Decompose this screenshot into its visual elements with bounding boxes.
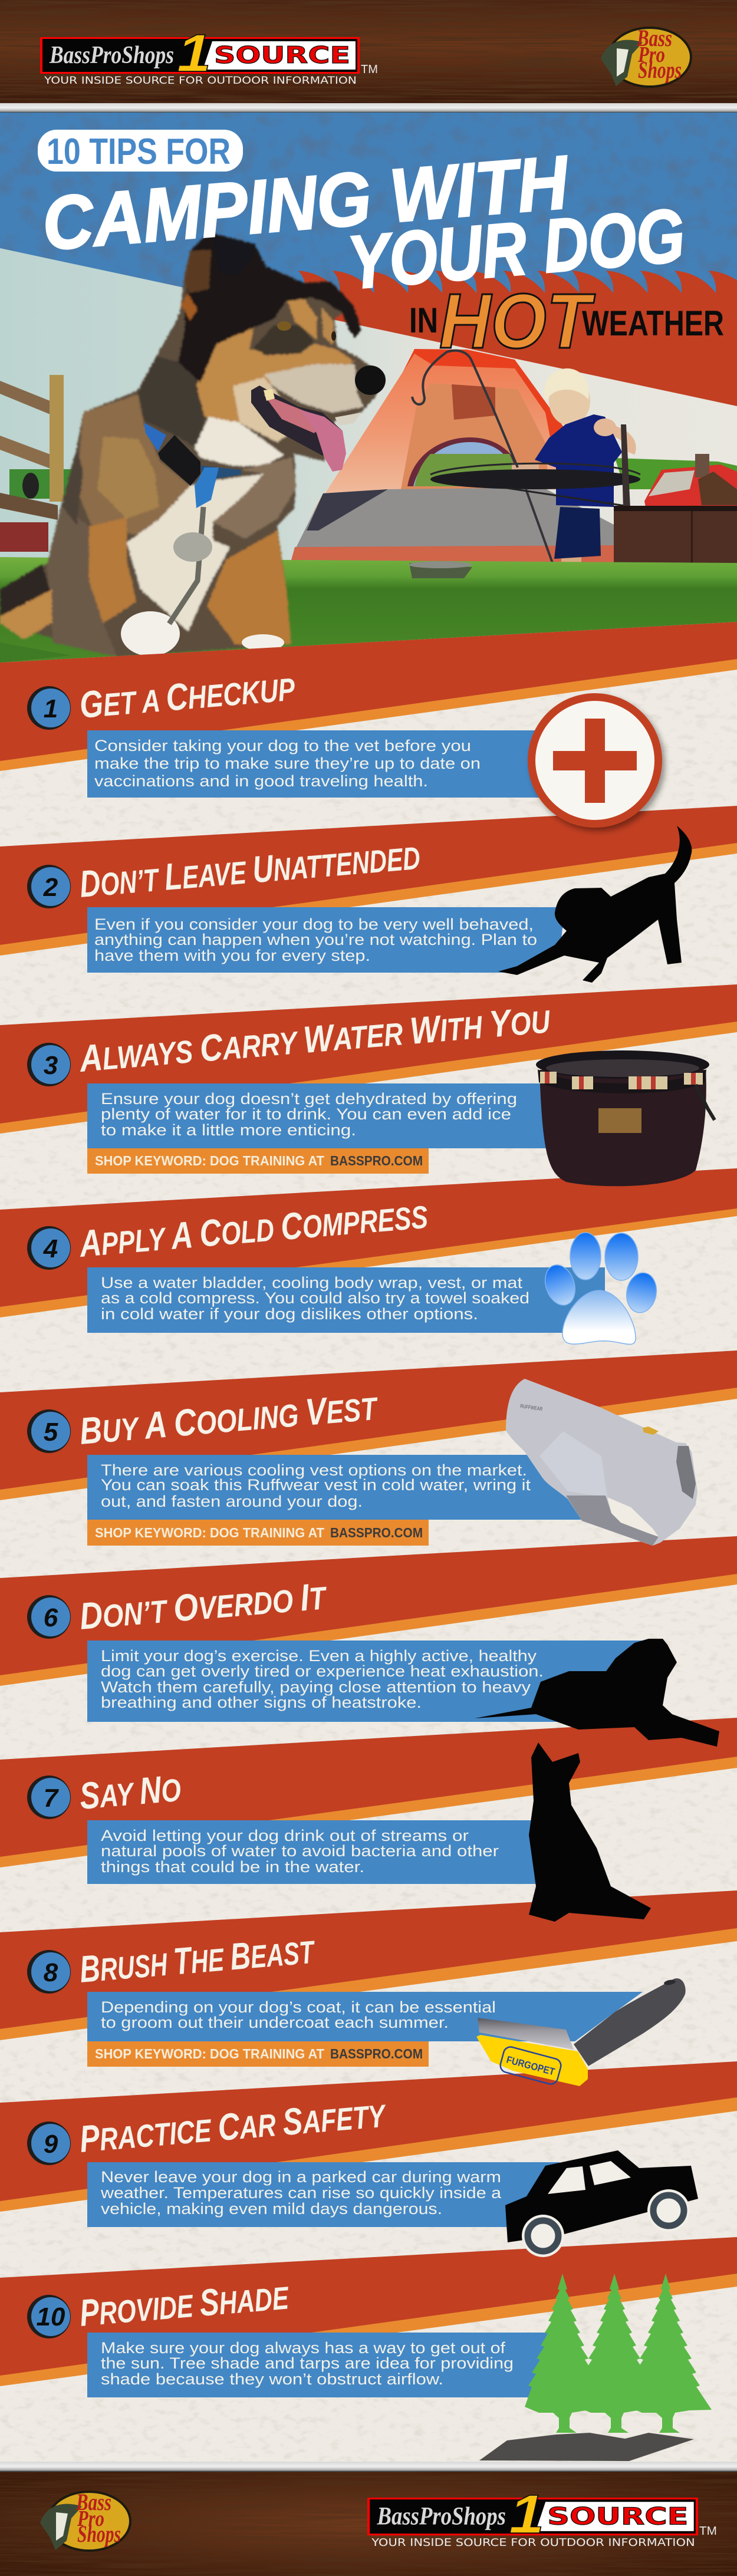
panel: tip 6 <box>27 1574 719 1747</box>
water bowl <box>409 561 472 578</box>
heading 5: BUY A COOLING VEST <box>78 1385 380 1452</box>
text box 6: Limit your dog’s exercise. Even a highly active, healthy <box>101 1647 537 1665</box>
number badge 9 <box>27 2122 71 2165</box>
flame band <box>264 271 737 413</box>
dog neck <box>138 356 207 447</box>
fire pit <box>614 506 737 577</box>
tent orange side <box>309 354 560 519</box>
panel: tip 10 <box>27 2274 712 2461</box>
tree shadow <box>479 2433 694 2461</box>
text box 6 <box>87 1641 653 1722</box>
child arm low <box>512 463 539 470</box>
number badge 1: 1 <box>44 694 58 723</box>
title: camping with your dog <box>40 140 687 305</box>
shop keyword bar 3 <box>87 1148 429 1174</box>
logo: Bass Pro Shops 1Source (footer) <box>367 2483 717 2549</box>
icon: blue paw <box>540 1233 660 1344</box>
dog brow <box>288 299 317 340</box>
text box 6: breathing and other signs of heatstroke. <box>101 1694 422 1711</box>
subtitle: in hot weather: IN <box>409 301 438 340</box>
child arm <box>607 429 631 453</box>
text box 10 <box>87 2333 550 2397</box>
text box 7: things that could be in the water. <box>101 1858 364 1876</box>
tent door <box>407 437 526 486</box>
hero title background <box>0 113 737 413</box>
text box 10: Make sure your dog always has a way to get out of <box>101 2339 506 2357</box>
panel: tip 9 <box>27 2092 698 2257</box>
text box 9 <box>87 2162 560 2227</box>
logo: Bass Pro Shops 1Source (footer): SOURCE <box>547 2503 688 2531</box>
heading 4: APPLY A COLD COMPRESS <box>77 1194 429 1265</box>
text box 3 <box>87 1083 553 1148</box>
child shorts <box>554 507 601 559</box>
dog tag and leash <box>169 507 203 624</box>
logo: Bass Pro Shops 1Source (footer): 1 <box>509 2483 544 2545</box>
text box 8 <box>87 1992 643 2041</box>
number badge 9: 9 <box>44 2130 58 2159</box>
number badge 5 <box>27 1409 71 1453</box>
dog lower lip <box>335 413 361 426</box>
dog <box>0 232 386 657</box>
grass <box>0 557 737 663</box>
number badge 3: 3 <box>44 1051 58 1080</box>
dog inner ear <box>185 251 211 293</box>
icon: three pine trees <box>479 2274 712 2461</box>
text box 1: vaccinations and in good traveling health. <box>94 772 428 790</box>
heading 6: DON’T OVERDO IT <box>78 1574 329 1638</box>
logo: Bass Pro Shops oval (footer) <box>40 2489 131 2552</box>
icon: playful dog silhouette <box>498 826 692 983</box>
text box 1: Consider taking your dog to the vet before you <box>94 737 471 755</box>
child shirt <box>535 414 622 507</box>
icon: travel water bowl <box>536 1050 715 1186</box>
child hand <box>594 419 616 436</box>
fire ring grill <box>412 351 640 576</box>
text box 4: as a cold compress. You could also try a towel soaked <box>101 1289 529 1307</box>
dog eye patch <box>254 325 314 355</box>
header wood bar <box>0 0 737 113</box>
number badge 6 <box>27 1595 71 1639</box>
icon: car <box>505 2150 698 2257</box>
dog upper chest <box>195 417 284 466</box>
tent red roof <box>393 349 563 454</box>
shop keyword bar 8 <box>87 2041 429 2067</box>
tent red trim <box>291 545 614 563</box>
text box 8: to groom out their undercoat each summer. <box>101 2014 449 2031</box>
logo: Bass Pro Shops 1Source (header): 1 <box>177 24 211 83</box>
text box 2: Even if you consider your dog to be very well behaved, <box>94 915 534 933</box>
footer wood bar <box>0 2462 737 2576</box>
dog head black <box>178 232 361 383</box>
text box 8: Depending on your dog’s coat, it can be essential <box>101 1998 496 2016</box>
brush logo <box>499 2045 562 2086</box>
text box 6: dog can get overly tired or experience heat exhaustion. <box>101 1662 544 1680</box>
icon: sitting dog silhouette <box>529 1742 651 1922</box>
brush head <box>476 2035 588 2086</box>
vest brand: RUFFWEAR <box>520 1403 543 1412</box>
text box 3: Ensure your dog doesn’t get dehydrated by offering <box>101 1090 517 1108</box>
icon: cooling vest <box>506 1379 697 1546</box>
text box 7: Avoid letting your dog drink out of streams or <box>101 1827 469 1844</box>
icon: medical cross <box>528 693 662 828</box>
number badge 4 <box>27 1226 71 1270</box>
child <box>512 368 631 579</box>
vest label <box>643 1427 659 1435</box>
dog tongue <box>300 410 346 472</box>
dog muzzle <box>264 364 363 413</box>
text box 5: out, and fasten around your dog. <box>101 1493 363 1510</box>
dog paws <box>121 611 180 656</box>
text box 9: Never leave your dog in a parked car during warm <box>101 2168 501 2186</box>
shop keyword bar 5: BASSPRO.COM <box>330 1525 423 1540</box>
heading 7: SAY NO <box>78 1767 183 1817</box>
tree 3 <box>628 2274 712 2433</box>
text box 9: weather. Temperatures can rise so quickly inside a <box>100 2184 502 2202</box>
dog teeth <box>264 389 275 401</box>
logo: Bass Pro Shops oval (footer): Bass <box>75 2489 111 2515</box>
text box 2 <box>87 907 565 973</box>
vest outer shape <box>506 1379 697 1546</box>
dog mouth <box>251 386 343 456</box>
logo: Bass Pro Shops 1Source (footer): TM <box>699 2524 717 2538</box>
number badge 7 <box>27 1775 71 1819</box>
diagonal ribbon bands <box>0 622 737 2386</box>
text box 10: the sun. Tree shade and tarps are idea for providing <box>101 2354 514 2372</box>
subtitle: in hot weather: HOT <box>439 278 595 364</box>
heading 1: GET A CHECKUP <box>78 666 297 726</box>
text box 4: in cold water if your dog dislikes other options. <box>101 1305 478 1323</box>
logo: Bass Pro Shops oval (header): Bass <box>636 25 672 51</box>
dog face tan <box>196 328 355 423</box>
number badge 1 <box>27 686 71 730</box>
panel: tip 3 <box>27 998 715 1186</box>
shop keyword bar 5 <box>87 1520 429 1546</box>
logo: Bass Pro Shops oval (header) <box>601 25 692 88</box>
icon: grooming brush <box>476 1978 686 2086</box>
panel: tip 8 <box>27 1929 686 2086</box>
text box 7 <box>87 1820 541 1884</box>
dog shoulder <box>77 394 190 541</box>
text box 2: have them with you for every step. <box>94 947 370 964</box>
panel: tip 7 <box>27 1742 651 1922</box>
tent window <box>452 384 495 420</box>
logo: Bass Pro Shops 1Source (header) <box>40 24 378 87</box>
text box 6: Watch them carefully, paying close attention to heavy <box>101 1678 531 1696</box>
distant hedge <box>615 458 737 489</box>
logo: Bass Pro Shops 1Source (footer): BassProShops <box>377 2502 506 2531</box>
logo: Bass Pro Shops oval (header): Pro <box>637 42 665 67</box>
fence <box>0 375 75 552</box>
tent <box>291 349 614 563</box>
hero photo: camp scene with dog <box>0 232 737 663</box>
logo: Bass Pro Shops 1Source (header): SOURCE <box>214 42 350 69</box>
text box 10: shade because they won’t obstruct airflow. <box>101 2370 443 2388</box>
shop keyword bar 5: SHOP KEYWORD: DOG TRAINING AT <box>95 1525 324 1540</box>
icon: lying dog silhouette <box>475 1639 719 1747</box>
logo: Bass Pro Shops 1Source (footer): YOUR INSIDE SOURCE FOR OUTDOOR INFORMATION <box>371 2537 695 2549</box>
dog lower white chest <box>127 474 264 631</box>
dog back and flank <box>0 232 384 657</box>
dog right leg <box>207 531 291 644</box>
text box 5: There are various cooling vest options on the market. <box>101 1461 527 1479</box>
logo: Bass Pro Shops oval (footer): Pro <box>77 2506 104 2531</box>
text box 2: anything can happen when you’re not watching. Plan to <box>94 931 537 948</box>
number badge 2: 2 <box>43 873 58 902</box>
shop keyword bar 3: BASSPRO.COM <box>330 1153 423 1168</box>
heading 8: BRUSH THE BEAST <box>78 1929 317 1991</box>
dog nose <box>355 365 386 395</box>
heading 10: PROVIDE SHADE <box>78 2274 291 2334</box>
vest hole <box>607 1497 659 1537</box>
text box 5 <box>87 1455 588 1520</box>
dog right chest fur <box>213 457 296 539</box>
panel: tip 1 <box>27 666 662 828</box>
logs <box>695 454 737 505</box>
logo: Bass Pro Shops oval (footer): Shops <box>77 2521 121 2547</box>
heading 3: ALWAYS CARRY WATER WITH YOU <box>77 998 552 1080</box>
vest lighter panel <box>539 1431 607 1497</box>
logo: Bass Pro Shops oval (header): Shops <box>638 57 682 83</box>
dog flank <box>47 505 117 657</box>
tree 1 <box>525 2274 601 2433</box>
pill: 10 tips for: 10 TIPS FOR <box>47 131 231 172</box>
dog left leg <box>89 518 136 623</box>
number badge 10 <box>27 2295 71 2338</box>
shop keyword bar 8: BASSPRO.COM <box>330 2046 423 2061</box>
number badge 6: 6 <box>44 1603 58 1632</box>
panel: tip 5 <box>27 1379 697 1546</box>
brush comb <box>478 2018 574 2050</box>
child legs <box>561 554 581 579</box>
panel: tip 4 <box>27 1194 660 1344</box>
logo: Bass Pro Shops 1Source (header): BassProShops <box>49 42 174 69</box>
tree 2 <box>577 2274 653 2433</box>
photo wall and sky <box>0 248 737 663</box>
collar <box>144 423 166 452</box>
number badge 8 <box>27 1950 71 1994</box>
number badge 5: 5 <box>44 1418 58 1447</box>
text box 4 <box>87 1267 605 1333</box>
text box 1 <box>87 730 541 798</box>
subtitle: in hot weather <box>409 278 724 364</box>
dog eye <box>277 321 291 331</box>
logo: Bass Pro Shops 1Source (header): TM <box>361 63 378 76</box>
child hair <box>544 368 589 401</box>
tent inner panel <box>401 383 548 489</box>
number badge 8: 8 <box>44 1958 58 1987</box>
vest inner lining <box>676 1446 696 1499</box>
leash strip <box>195 467 219 508</box>
logo: Bass Pro Shops 1Source (header): YOUR INSIDE SOURCE FOR OUTDOOR INFORMATION <box>44 75 357 87</box>
red car <box>644 465 737 507</box>
number badge 10: 10 <box>37 2302 65 2331</box>
text box 5: You can soak this Ruffwear vest in cold water, wring it <box>101 1476 531 1494</box>
shop keyword bar 3: SHOP KEYWORD: DOG TRAINING AT <box>95 1153 324 1168</box>
brush handle <box>574 1978 686 2066</box>
brush logo: FURGOPET <box>505 2054 556 2078</box>
number badge 3 <box>27 1043 71 1086</box>
heading 2: DON’T LEAVE UNATTENDED <box>78 835 422 905</box>
heading 9: PRACTICE CAR SAFETY <box>78 2092 389 2160</box>
photo foreground grass <box>0 643 71 663</box>
panel: tip 2 <box>27 826 692 983</box>
text box 4: Use a water bladder, cooling body wrap, vest, or mat <box>101 1274 523 1292</box>
shop keyword bar 8: SHOP KEYWORD: DOG TRAINING AT <box>95 2046 324 2061</box>
number badge 4: 4 <box>43 1234 58 1263</box>
tent grey fly <box>295 487 614 550</box>
title: camping with your dog: CAMPING WITH <box>40 140 573 266</box>
text box 9: vehicle, making even mild days dangerous. <box>101 2200 442 2218</box>
number badge 2 <box>27 865 71 908</box>
child face <box>549 376 590 426</box>
vest lower strap <box>566 1495 659 1546</box>
text box 3: to make it a little more enticing. <box>101 1121 356 1139</box>
number badge 7: 7 <box>44 1784 60 1813</box>
text box 1: make the trip to make sure they’re up to date on <box>94 755 481 772</box>
dog hind <box>0 564 52 619</box>
text box 7: natural pools of water to avoid bacteria and other <box>101 1842 499 1860</box>
text box 3: plenty of water for it to drink. You can even add ice <box>101 1105 511 1123</box>
